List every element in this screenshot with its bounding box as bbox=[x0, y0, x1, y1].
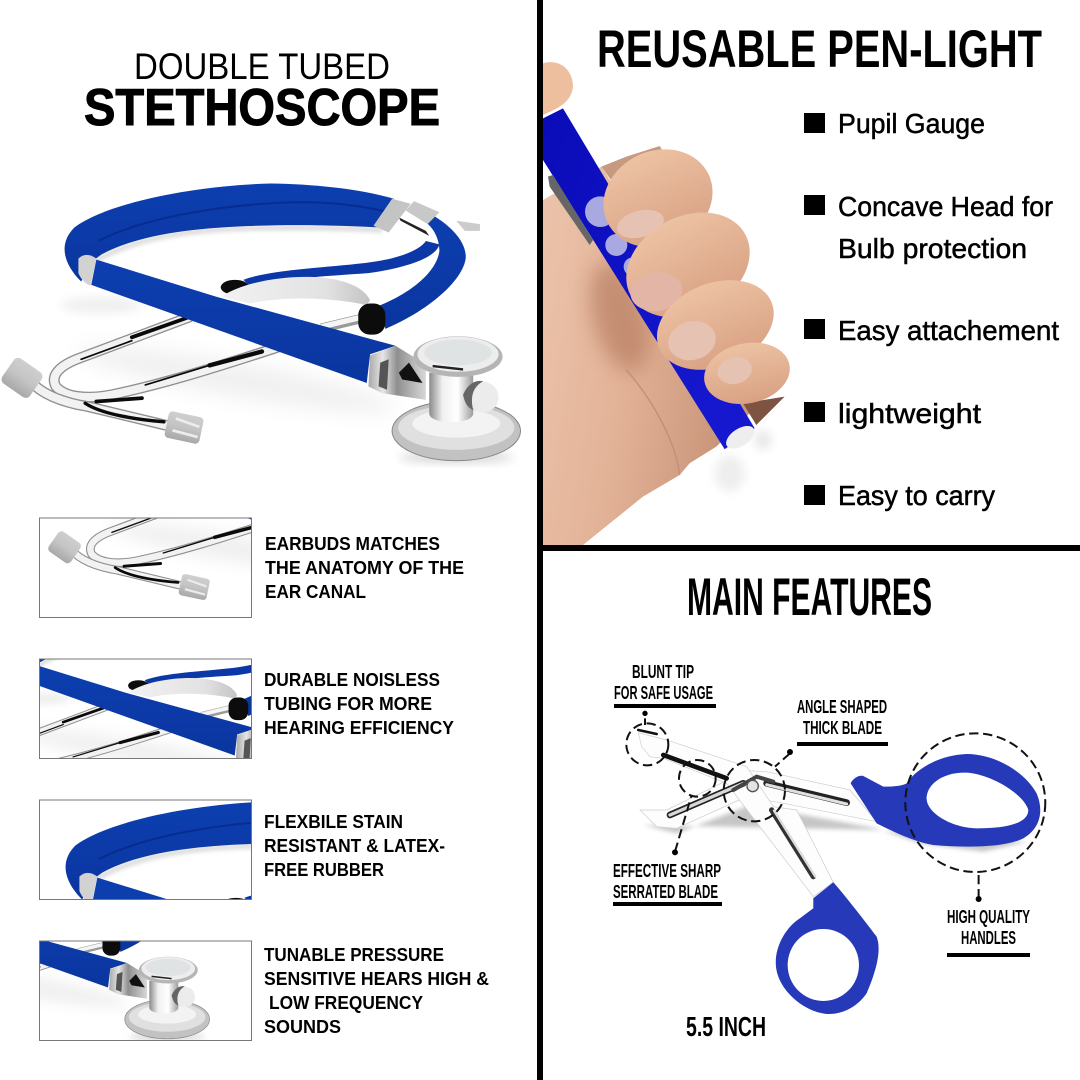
detail: earbuds thumbnail bbox=[39, 518, 252, 618]
caption: earbuds: EAR CANAL bbox=[265, 582, 366, 602]
panel: pen-light bbox=[543, 20, 1059, 545]
caption: earbuds: THE ANATOMY OF THE bbox=[265, 558, 464, 578]
panel: main features bbox=[613, 568, 1045, 1042]
caption: tubing bbox=[264, 670, 454, 738]
panel: stethoscope bbox=[0, 46, 522, 1080]
feature list bbox=[804, 108, 1059, 511]
caption: earbuds bbox=[265, 534, 464, 602]
detail: chest piece thumbnail bbox=[39, 940, 252, 1041]
label: high quality handles: HIGH QUALITY bbox=[947, 907, 1030, 927]
heading: double tubed stethoscope bbox=[84, 46, 440, 137]
caption: earbuds: EARBUDS MATCHES bbox=[265, 534, 440, 554]
caption: rubber: RESISTANT & LATEX- bbox=[264, 836, 445, 856]
label: blunt tip: FOR SAFE USAGE bbox=[614, 683, 713, 703]
label: size 5.5 inch: 5.5 INCH bbox=[686, 1011, 766, 1042]
label: high quality handles bbox=[947, 907, 1030, 957]
caption: tubing: DURABLE NOISLESS bbox=[264, 670, 440, 690]
heading: double tubed stethoscope: DOUBLE TUBED bbox=[134, 46, 390, 87]
detail: tubing thumbnail bbox=[39, 658, 252, 759]
label: blunt tip bbox=[614, 662, 716, 708]
caption: chest piece bbox=[264, 945, 489, 1037]
caption: rubber: FLEXBILE STAIN bbox=[264, 812, 403, 832]
caption: chest piece: TUNABLE PRESSURE bbox=[264, 945, 444, 965]
caption: chest piece: SENSITIVE HEARS HIGH & bbox=[264, 969, 489, 989]
label: serrated blade bbox=[613, 861, 722, 906]
label: serrated blade: SERRATED BLADE bbox=[613, 882, 718, 902]
label: angle shaped thick blade: THICK BLADE bbox=[803, 718, 882, 738]
caption: chest piece: SOUNDS bbox=[264, 1017, 341, 1037]
label: serrated blade: EFFECTIVE SHARP bbox=[613, 861, 721, 881]
caption: rubber: FREE RUBBER bbox=[264, 860, 384, 880]
label: angle shaped thick blade bbox=[797, 697, 888, 746]
heading: double tubed stethoscope: STETHOSCOPE bbox=[84, 79, 440, 137]
bullet: concave head: Concave Head for bbox=[838, 191, 1053, 222]
bullet: easy to carry: Easy to carry bbox=[838, 480, 995, 511]
caption: rubber bbox=[264, 812, 445, 880]
caption: tubing: TUBING FOR MORE bbox=[264, 694, 432, 714]
bullet: pupil gauge: Pupil Gauge bbox=[838, 108, 985, 139]
label: blunt tip: BLUNT TIP bbox=[632, 662, 694, 682]
caption: chest piece: LOW FREQUENCY bbox=[269, 993, 423, 1013]
label: high quality handles: HANDLES bbox=[961, 928, 1016, 948]
image: hand holding blue pen-light bbox=[543, 62, 796, 545]
image: blue stethoscope bbox=[0, 184, 521, 463]
image: blue trauma scissors bbox=[626, 711, 1045, 1014]
detail: rubber thumbnail bbox=[39, 800, 252, 900]
bullet: easy attachement: Easy attachement bbox=[838, 315, 1059, 346]
label: angle shaped thick blade: ANGLE SHAPED bbox=[797, 697, 887, 717]
bullet: lightweight: lightweight bbox=[838, 398, 981, 429]
caption: tubing: HEARING EFFICIENCY bbox=[264, 718, 454, 738]
bullet: concave head bbox=[804, 191, 1053, 264]
bullet: concave head: Bulb protection bbox=[838, 233, 1027, 264]
